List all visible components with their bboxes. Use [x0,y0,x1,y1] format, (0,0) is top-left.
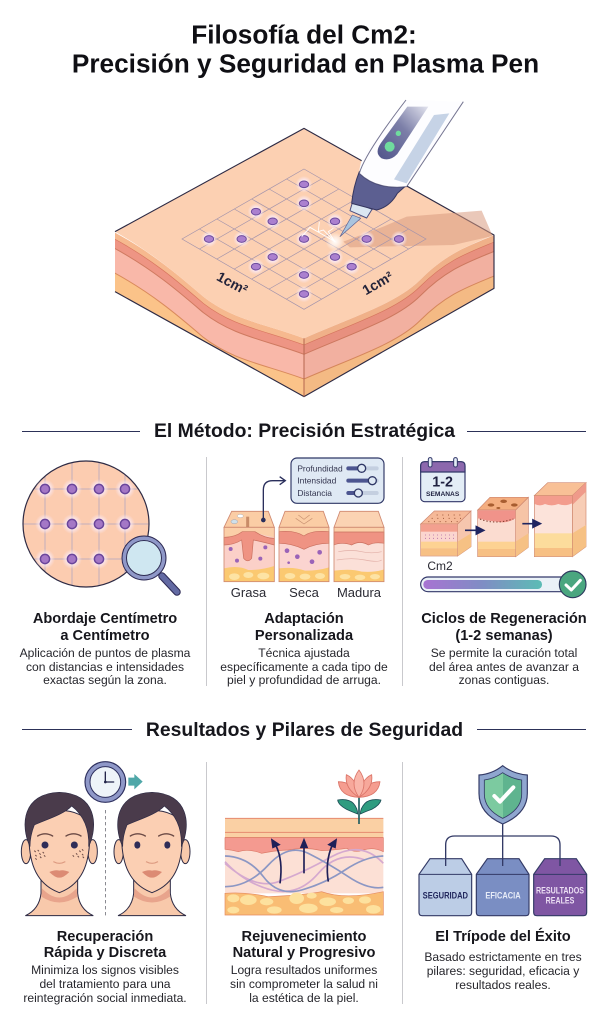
title: Precisión y Seguridad en Plasma Pen [72,48,539,78]
skin block 2 [478,497,528,557]
skin cross-section layers [115,232,494,396]
text: Recuperación [23,929,187,1005]
settings panel: Distancia [297,488,332,498]
connectors [446,820,560,866]
text: Ciclos de Regeneración [421,611,587,687]
hero illustration: skin block with plasma pen [114,100,495,398]
arrow: block 2 to block 3 [522,520,540,527]
text: Recuperación: Minimiza los signos visibles [31,963,179,977]
text: El Trípode del Éxito: Basado estrictamente en tres [424,950,582,964]
text: Recuperación: Recuperación [57,929,153,945]
labels: skin types: Grasa [231,585,267,600]
pen shadow [343,211,493,247]
text: Adaptación Personalizada [220,611,388,687]
skin block 3 [534,483,586,557]
icon: magnified skin with plasma dots [20,460,177,592]
pillar: eficacia: EFICACIA [485,890,521,900]
arrow [128,774,143,789]
text: Recuperación: del tratamiento para una [39,977,171,991]
skin block 1 [421,511,471,556]
label: 1cm2 left: 1cm² [214,268,251,298]
text: Abordaje Centímetro: exactas según la zona. [43,673,167,687]
label: Cm2: Cm2 [427,559,453,573]
shield [479,766,527,824]
title [72,20,539,78]
spark [302,222,344,251]
text: Adaptación Personalizada: Adaptación [264,611,344,627]
calendar: 1-2 [432,475,453,491]
settings panel: Intensidad [297,476,337,486]
pillar: resultados reales [534,859,587,916]
text: Abordaje Centímetro [20,611,191,687]
icon: faces before and after [21,762,190,916]
flower [338,770,381,824]
pillar: eficacia [476,859,529,916]
text: Abordaje Centímetro: a Centímetro [60,628,150,644]
title: Filosofía del Cm2: [191,20,417,50]
labels: skin types: Madura [337,585,382,600]
text: Rejuvenecimiento: Natural y Progresivo [233,945,375,961]
settings panel: Profundidad [297,463,343,473]
text: Rejuvenecimiento: Rejuvenecimiento [242,929,367,945]
icon: regeneration cycle [421,458,586,598]
text: Recuperación: reintegración social inmediata. [23,991,187,1005]
dashed divider [104,810,107,916]
icon: shield and three pillars [419,766,587,916]
skin: madura [334,511,384,582]
text: Abordaje Centímetro: con distancias e intensidades [26,660,184,674]
text: Ciclos de Regeneración: Ciclos de Regeneración [421,611,587,627]
text: Adaptación Personalizada: Personalizada [255,628,354,644]
labels: skin types: Seca [289,585,320,600]
progress bar [421,571,586,598]
pillar: seguridad: SEGURIDAD [423,890,468,900]
text: Ciclos de Regeneración: del área antes de avanzar a [429,660,579,674]
labels: skin types [231,585,382,600]
pillar: seguridad [419,859,472,916]
face before [21,792,97,916]
arrow: skin to settings [261,477,285,522]
pillar: resultados reales: REALES [546,895,574,905]
top skin surface [115,128,493,338]
text: Adaptación Personalizada: piel y profundidad de arruga. [227,673,381,687]
plasma pen [340,100,463,237]
text: Adaptación Personalizada: específicamente a cada tipo de [220,660,388,674]
text: Rejuvenecimiento: Logra resultados uniformes [231,963,377,977]
calendar: SEMANAS [426,491,460,498]
text: Rejuvenecimiento: sin comprometer la salud ni [230,977,378,991]
text: Rejuvenecimiento [230,929,378,1005]
text: Recuperación: Rápida y Discreta [44,945,167,961]
block outline [115,128,494,397]
text: El Trípode del Éxito [424,928,582,992]
calendar [421,458,465,502]
pillar: resultados reales: RESULTADOS [536,885,584,895]
section heading: El Método: El Método: Precisión Estratégica [154,420,455,442]
skin: grasa [224,511,274,582]
text: Rejuvenecimiento: la estética de la piel. [249,991,359,1005]
text: Ciclos de Regeneración: Se permite la curación total [431,646,577,660]
measurement grid [182,169,426,309]
column dividers row 1 [206,457,402,686]
text: El Trípode del Éxito: pilares: seguridad, eficacia y [427,964,580,978]
text: El Trípode del Éxito: El Trípode del Éxito [435,928,571,945]
settings panel [291,458,384,503]
clock [85,762,126,802]
text: Adaptación Personalizada: Técnica ajustada [258,646,350,660]
arrow: block 1 to block 2 [465,527,484,534]
arrows upward [272,840,336,883]
skin layers [225,818,383,915]
skin: seca [279,511,329,582]
face after [114,792,190,916]
plasma dots [201,176,407,302]
label: 1cm2 right: 1cm² [359,268,396,298]
text: Abordaje Centímetro: Abordaje Centímetro [33,611,177,627]
icon: skin cross-section with flower [225,770,383,915]
text: Abordaje Centímetro: Aplicación de puntos de plasma [20,646,191,660]
text: Ciclos de Regeneración: zonas contiguas. [459,673,549,687]
section heading: Resultados y Pilares: Resultados y Pilares de Seguridad [146,719,463,741]
icon: skin types with settings panel [224,458,384,582]
column dividers row 2 [206,762,402,1004]
text: Ciclos de Regeneración: (1-2 semanas) [455,628,553,644]
text: El Trípode del Éxito: resultados reales. [455,978,551,992]
